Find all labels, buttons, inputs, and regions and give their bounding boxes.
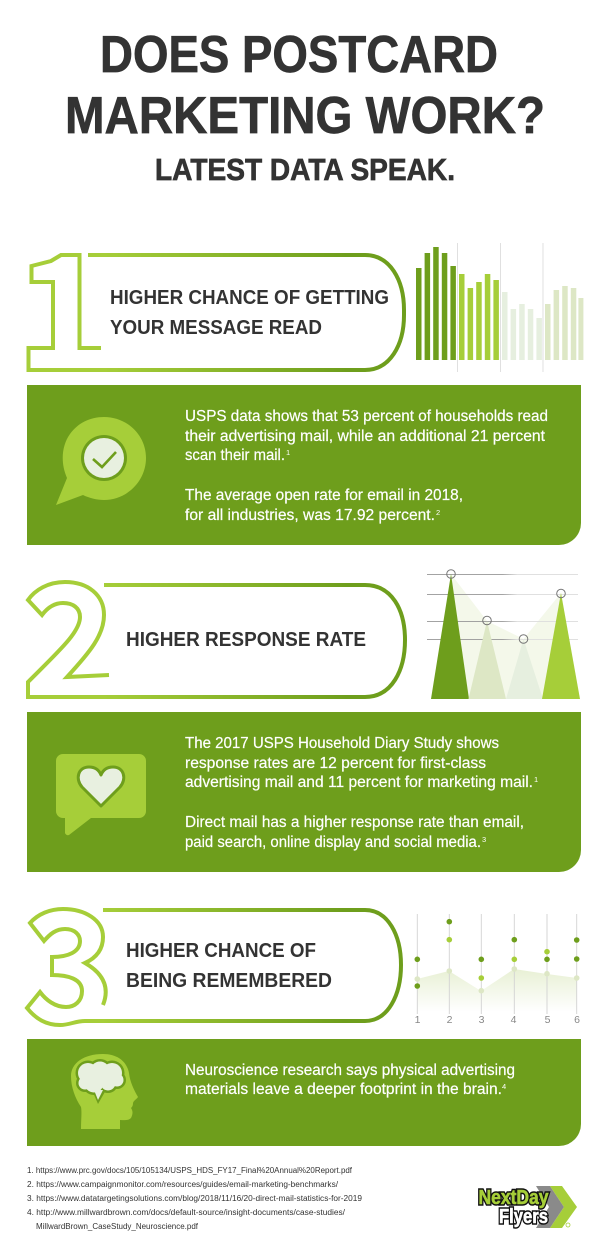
section 3 heading with numeral outline: BEING REMEMBERED [126,969,332,992]
icon: head with brain [71,1054,138,1129]
dot chart: 2 [447,1014,453,1026]
title: LATEST DATA SPEAK. [155,152,455,187]
logo [478,1186,577,1228]
footnotes: MillwardBrown_CaseStudy_Neuroscience.pdf [36,1222,199,1231]
text block [185,735,538,851]
peak chart [427,570,580,699]
text block [185,408,548,524]
logo: NextDay [478,1187,549,1209]
text block: 4 [502,1082,506,1091]
text block: The 2017 USPS Household Diary Study shows [185,735,499,752]
text block: 3 [482,835,486,844]
logo: NextDay [478,1187,549,1209]
text block: for all industries, was 17.92 percent. [185,507,435,524]
logo: Flyers [499,1206,548,1228]
text block: USPS data shows that 53 percent of households read [185,408,548,425]
dot chart: 6 [574,1014,580,1026]
section 3 heading with numeral outline [27,909,401,1025]
panel: section 3 facts [27,1039,581,1146]
icon: heart speech bubble [56,754,146,835]
footnotes: 4. http://www.millwardbrown.com/docs/default-source/insight-documents/case-studies/ [27,1208,346,1217]
title: DOES POSTCARD [100,26,498,84]
text block: scan their mail. [185,447,285,464]
footnotes: 2. https://www.campaignmonitor.com/resources/guides/email-marketing-benchmarks/ [27,1180,339,1189]
dot chart: 1 [415,1014,421,1026]
text block: The average open rate for email in 2018, [185,487,463,504]
icon: check mark speech bubble [56,417,146,505]
text block: Direct mail has a higher response rate than email, [185,814,524,831]
title: MARKETING WORK? [65,87,545,145]
section 3 heading with numeral outline: HIGHER CHANCE OF [126,939,316,962]
text block: materials leave a deeper footprint in the brain. [185,1081,502,1098]
section 1 heading with numeral outline: HIGHER CHANCE OF GETTING [110,286,389,309]
section 2 heading with numeral outline [28,582,405,697]
dot chart: 3 [479,1014,485,1026]
panel: section 2 facts [27,712,581,872]
text block: 2 [436,508,440,517]
section 1 heading with numeral outline: YOUR MESSAGE READ [110,316,322,339]
footnotes: 3. https://www.datatargetingsolutions.com/blog/2018/11/16/20-direct-mail-statistics-for-2019 [27,1194,363,1203]
section 1 heading with numeral outline [28,255,404,370]
dot chart: 5 [545,1014,551,1026]
text block: advertising mail and 11 percent for marketing mail. [185,774,533,791]
footnotes: 1. https://www.prc.gov/docs/105/105134/USPS_HDS_FY17_Final%20Annual%20Report.pdf [27,1166,353,1175]
section 2 heading with numeral outline: HIGHER RESPONSE RATE [126,628,366,651]
text block: 1 [286,448,290,457]
footnotes [27,1166,363,1231]
text block: response rates are 12 percent for first-class [185,755,486,772]
bar chart [416,243,583,372]
panel: section 1 facts [27,385,581,545]
text block: 1 [534,775,538,784]
text block: Neuroscience research says physical advertising [185,1062,515,1079]
logo: Flyers [499,1206,548,1228]
title [65,26,545,187]
dot chart: 4 [511,1014,517,1026]
text block: their advertising mail, while an additional 21 percent [185,428,546,445]
text block: paid search, online display and social media. [185,834,481,851]
text block [185,1062,515,1098]
dot chart [414,914,580,1026]
